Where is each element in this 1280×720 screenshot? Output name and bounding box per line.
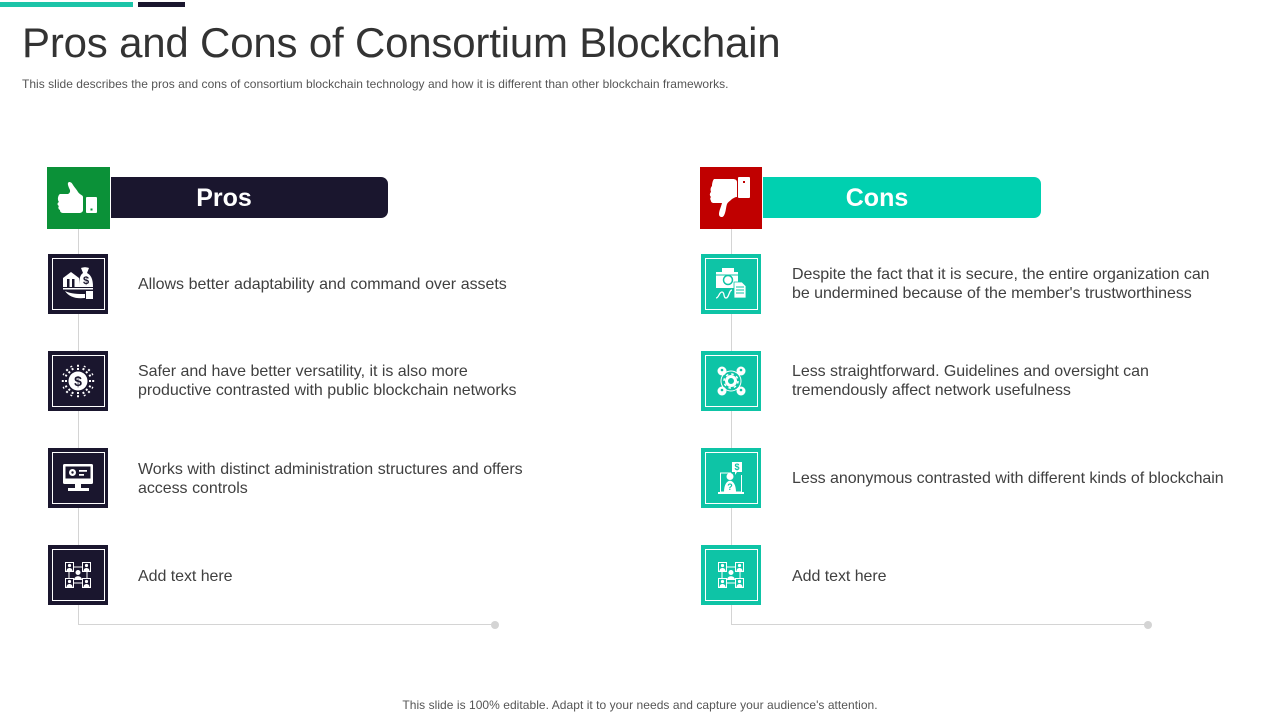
icon: briefcase and document xyxy=(701,254,761,314)
timeline connector: cons xyxy=(731,229,1152,629)
icon: thumbs down xyxy=(700,167,762,229)
pros header bar xyxy=(111,177,388,218)
pros row 3 xyxy=(48,448,108,508)
cons text 1: be undermined because of the member's trustworthiness xyxy=(792,285,1192,302)
cons text 3: Less anonymous contrasted with different kinds of blockchain xyxy=(792,470,1224,487)
cons row 2 xyxy=(701,351,761,411)
cons text 1: Despite the fact that it is secure, the entire organization can xyxy=(792,266,1210,283)
pros heading: Pros xyxy=(196,184,252,212)
icon: monitor with gear xyxy=(48,448,108,508)
icon: anonymous user on laptop xyxy=(701,448,761,508)
panel: cons xyxy=(700,167,1152,629)
pros text 3 xyxy=(138,461,523,497)
top accent bar: navy xyxy=(138,2,185,7)
timeline connector: pros xyxy=(78,229,499,629)
icon: dollar with arrows: $ xyxy=(74,373,82,389)
icon: people network xyxy=(701,545,761,605)
top accent bar: teal xyxy=(0,2,133,7)
pros row 1 xyxy=(48,254,108,314)
cons text 1 xyxy=(792,266,1210,302)
icon: assets in hand xyxy=(48,254,108,314)
icon: dollar with arrows xyxy=(48,351,108,411)
pros text 4: Add text here xyxy=(138,568,233,585)
pros text 2: productive contrasted with public blockchain networks xyxy=(138,382,516,399)
cons heading: Cons xyxy=(846,184,908,212)
pros text 2: Safer and have better versatility, it is also more xyxy=(138,363,468,380)
icon: anonymous user on laptop: $ xyxy=(734,462,740,472)
subtitle: This slide describes the pros and cons of consortium blockchain technology and how it is different than other blockchain frameworks. xyxy=(22,77,729,91)
title: Pros and Cons of Consortium Blockchain xyxy=(22,19,780,66)
pros row 2 xyxy=(48,351,108,411)
cons text 4: Add text here xyxy=(792,568,887,585)
cons text 2: Less straightforward. Guidelines and oversight can xyxy=(792,363,1149,380)
pros row 4 xyxy=(48,545,108,605)
cons header bar xyxy=(763,177,1041,218)
pros text 1: Allows better adaptability and command over assets xyxy=(138,276,507,293)
cons text 2: tremendously affect network usefulness xyxy=(792,382,1071,399)
cons row 3 xyxy=(701,448,761,508)
icon: people network xyxy=(48,545,108,605)
icon: thumbs up xyxy=(47,167,110,229)
panel: pros xyxy=(47,167,499,629)
icon: gear with people xyxy=(701,351,761,411)
icon: anonymous user on laptop: ? xyxy=(727,482,733,492)
cons row 1 xyxy=(701,254,761,314)
pros text 2 xyxy=(138,363,516,399)
pros text 3: Works with distinct administration structures and offers xyxy=(138,461,523,478)
pros text 3: access controls xyxy=(138,480,248,497)
cons text 2 xyxy=(792,363,1149,399)
footer note: This slide is 100% editable. Adapt it to your needs and capture your audience's attention. xyxy=(402,698,878,712)
cons row 4 xyxy=(701,545,761,605)
icon: assets in hand: $ xyxy=(83,275,89,287)
